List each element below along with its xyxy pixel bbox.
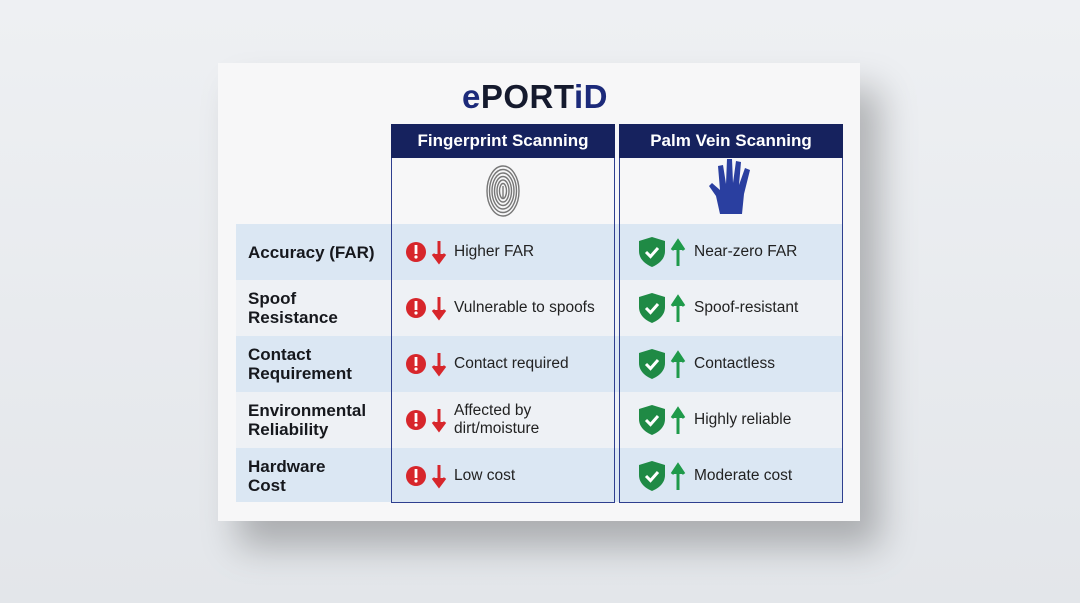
card: Vulnerable to spoofs [454, 299, 595, 316]
card: Low cost [454, 467, 515, 484]
card: Contact required [454, 355, 569, 372]
header: palm: Palm Vein Scanning [650, 131, 812, 150]
card: dirt/moisture [454, 420, 539, 437]
column: fingerprint [391, 124, 615, 503]
palm cells [639, 237, 798, 491]
column: palm [619, 124, 843, 503]
card: Reliability [248, 420, 328, 439]
icon: fingerprint [486, 165, 520, 217]
card: Resistance [248, 308, 338, 327]
card: Near-zero FAR [694, 243, 797, 260]
card: Highly reliable [694, 411, 791, 428]
card: Affected by [454, 402, 531, 419]
card: Hardware [248, 457, 325, 476]
card: Contact [248, 345, 311, 364]
card: Cost [248, 476, 286, 495]
card: Environmental [248, 401, 366, 420]
row labels [248, 243, 375, 495]
header: palm [619, 124, 843, 158]
card: Accuracy (FAR) [248, 243, 375, 262]
icon: palm [709, 159, 750, 214]
card [218, 63, 860, 521]
fingerprint cells [406, 241, 595, 488]
card: Requirement [248, 364, 352, 383]
header: fingerprint: Fingerprint Scanning [418, 131, 588, 150]
logo: ePORTiD [462, 78, 608, 115]
card: Spoof [248, 289, 296, 308]
card: Contactless [694, 355, 775, 372]
header: fingerprint [391, 124, 615, 158]
row bands [236, 224, 842, 502]
card: Spoof-resistant [694, 299, 798, 316]
card: Higher FAR [454, 243, 534, 260]
card: Moderate cost [694, 467, 792, 484]
